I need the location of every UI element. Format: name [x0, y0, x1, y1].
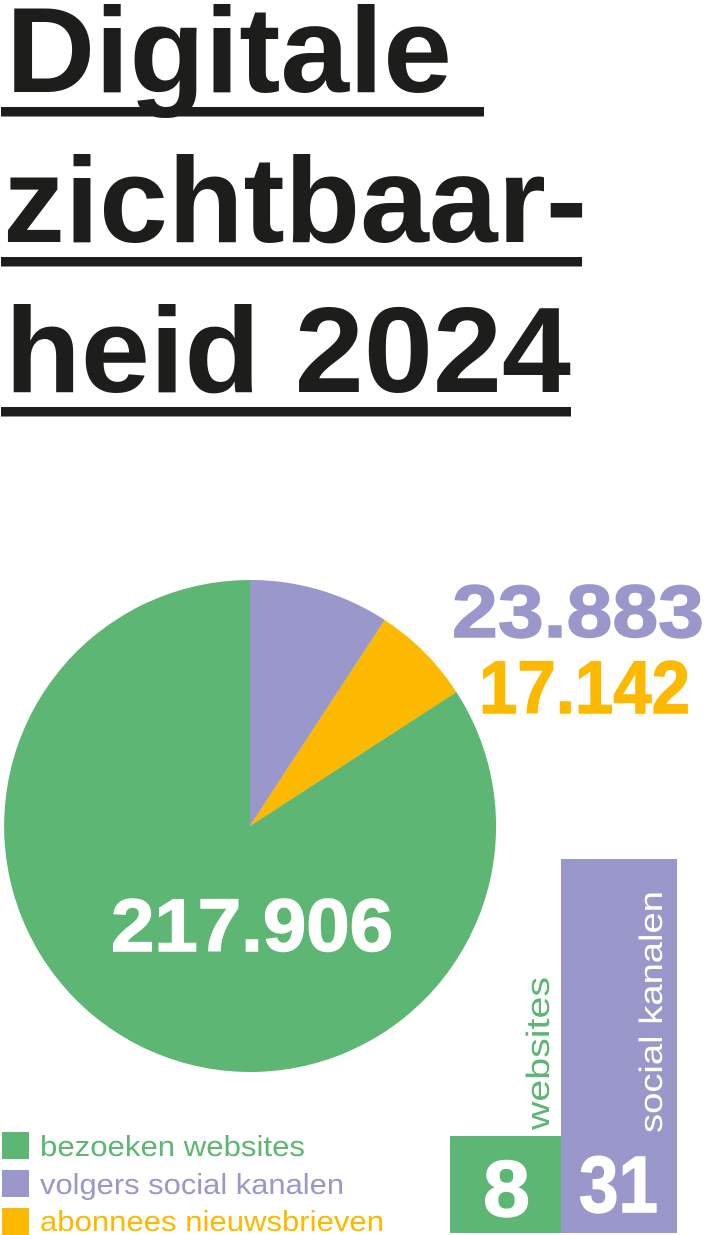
pie slice: abonnees nieuwsbrieven — [250, 620, 456, 826]
pie slice: bezoeken websites — [4, 580, 496, 1072]
bar: social kanalen — [561, 859, 677, 1233]
legend item: bezoeken websites: bezoeken websites — [40, 1131, 305, 1163]
value: abonnees nieuwsbrieven: 17.142 — [479, 646, 690, 729]
bar: websites: 8 — [483, 1144, 530, 1233]
value: volgers social kanalen: 23.883 — [452, 570, 704, 653]
bar: social kanalen: 31 — [579, 1140, 658, 1229]
bar label: social kanalen: social kanalen — [633, 891, 669, 1133]
bar label: websites: websites — [520, 977, 556, 1131]
title line 2: zichtbaar- — [3, 132, 587, 268]
bar chart — [450, 859, 677, 1233]
pie slice: volgers social kanalen — [250, 580, 385, 826]
value: bezoeken websites: 217.906 — [111, 884, 393, 967]
legend item: volgers social kanalen: volgers social kanalen — [40, 1169, 344, 1201]
title — [1, 0, 587, 418]
bar: websites — [450, 1136, 561, 1233]
title line 3: heid 2024 — [5, 282, 571, 418]
legend — [2, 1131, 384, 1235]
pie chart — [4, 580, 496, 1072]
